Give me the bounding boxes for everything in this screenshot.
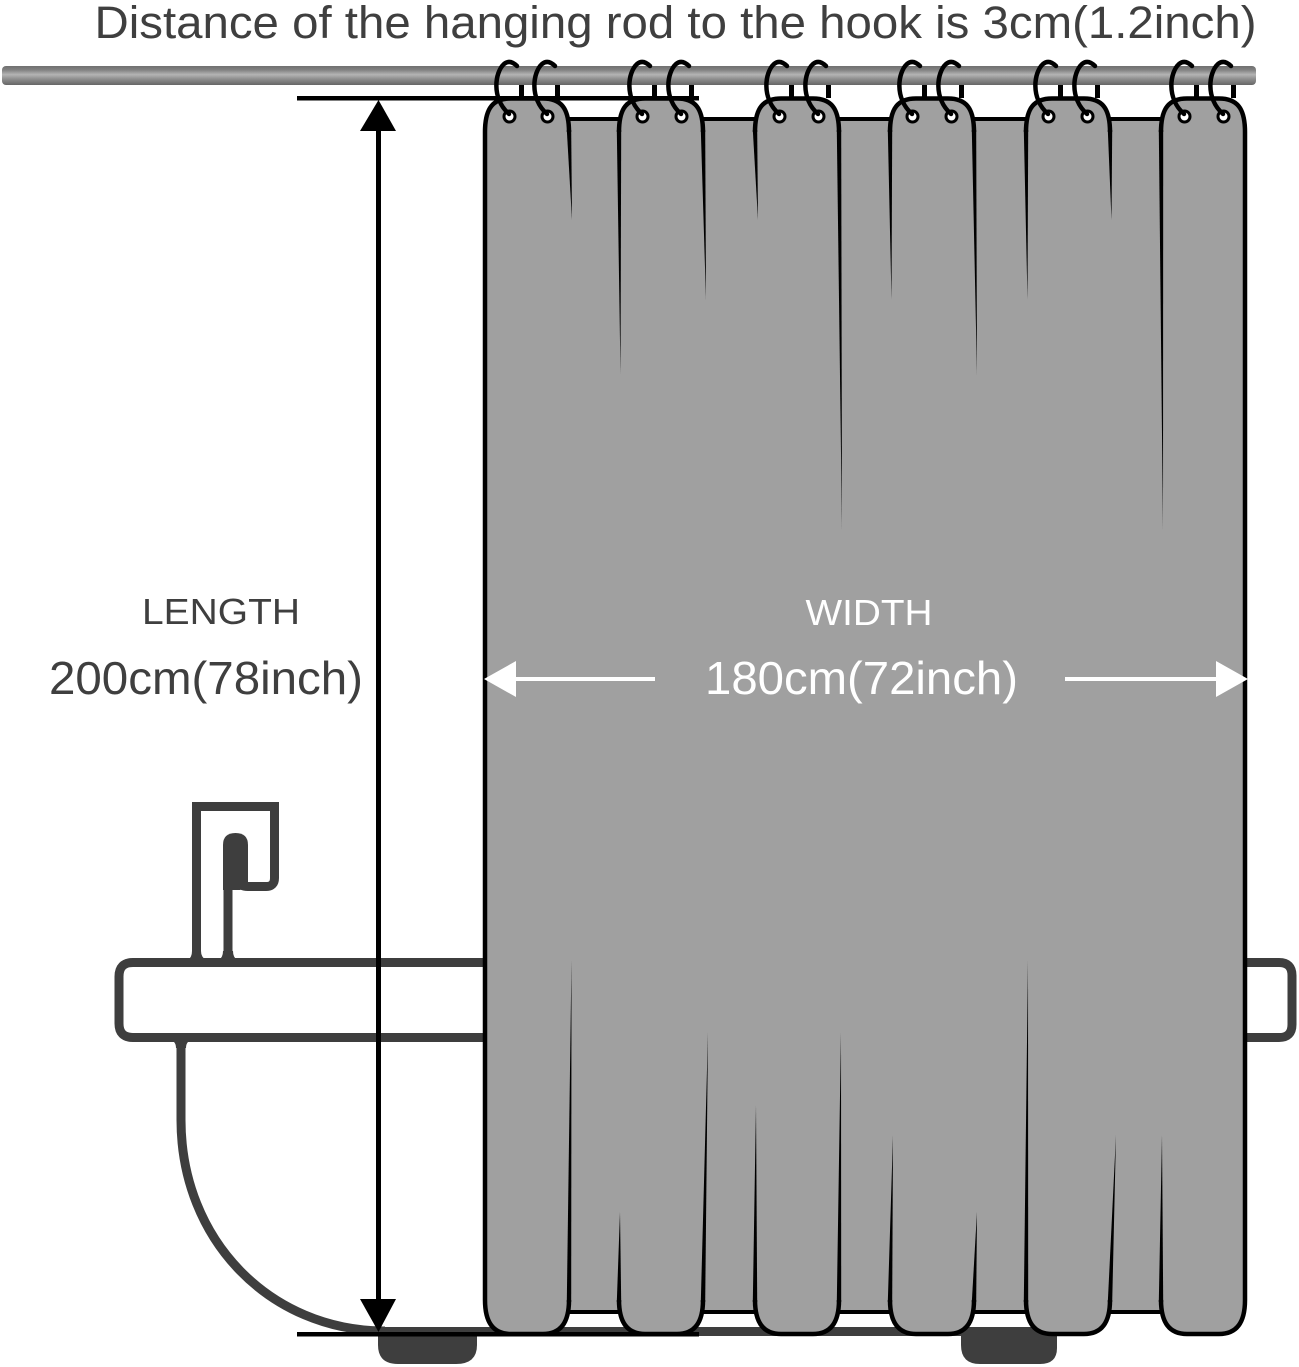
bathtub feet bbox=[378, 1327, 1057, 1364]
curtain bbox=[485, 98, 1245, 1334]
length arrow bbox=[360, 100, 396, 1332]
tub base bar bbox=[380, 1327, 1000, 1336]
height dimension guide lines bbox=[297, 96, 699, 1336]
width arrow left bbox=[484, 661, 655, 697]
bathtub bbox=[119, 806, 1292, 1331]
length label: LENGTH bbox=[142, 591, 300, 632]
curtain body edges bbox=[569, 119, 1161, 1312]
curtain hooks bbox=[496, 62, 1231, 122]
hanging rod bbox=[2, 66, 1256, 85]
ring hooks bbox=[496, 62, 1231, 114]
tab outlines bbox=[485, 98, 1245, 1334]
width label: WIDTH bbox=[806, 592, 932, 633]
pleat creases bbox=[567, 130, 1163, 1302]
curtain fabric between tabs bbox=[565, 119, 1165, 1312]
hook stubs bbox=[519, 85, 1236, 98]
width arrow right bbox=[1065, 661, 1248, 697]
curtain pleat tabs bbox=[485, 98, 1245, 1334]
eyelets bbox=[504, 111, 1229, 122]
width value: 180cm(72inch) bbox=[705, 652, 1018, 704]
soap dish bbox=[188, 806, 274, 961]
length value: 200cm(78inch) bbox=[49, 652, 363, 704]
